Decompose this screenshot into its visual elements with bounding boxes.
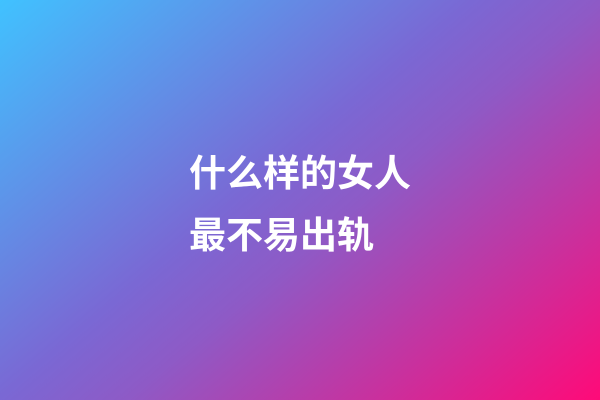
- title: 最不易出轨: [189, 215, 374, 256]
- title: [189, 153, 411, 256]
- title: 什么样的女人: [189, 153, 411, 194]
